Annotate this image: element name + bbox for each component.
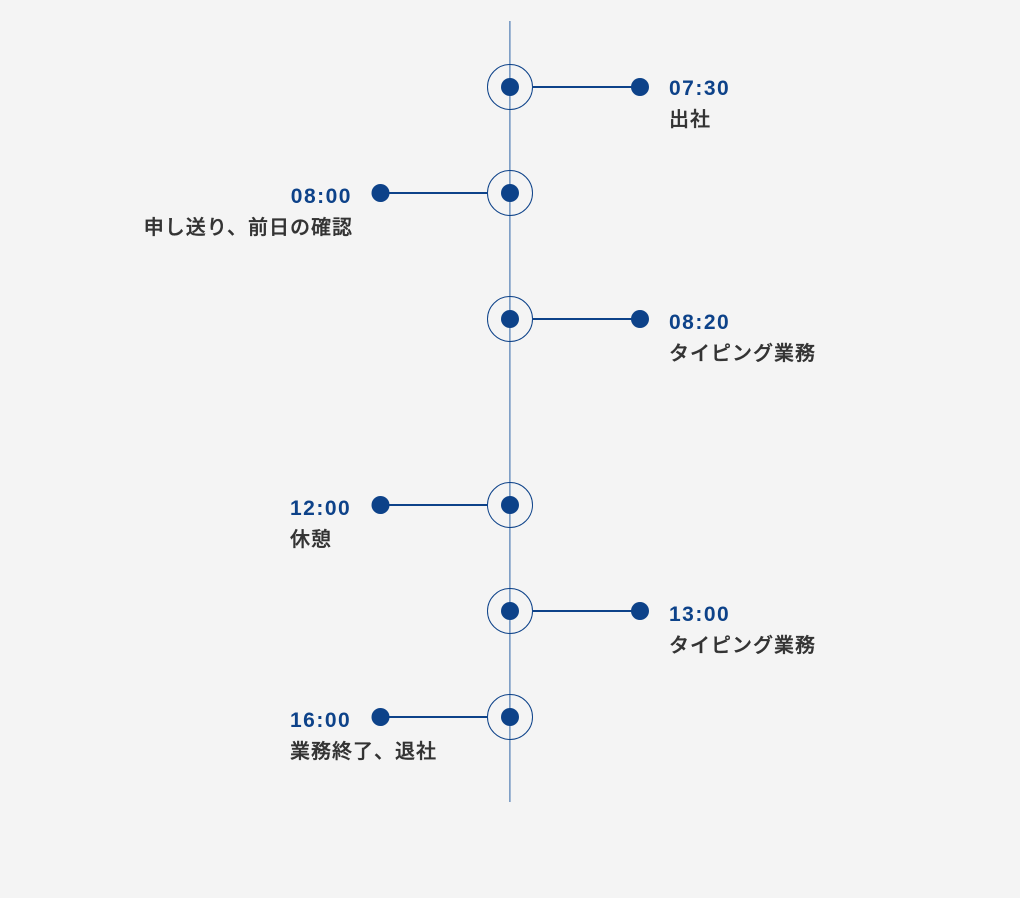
node 12:00 (372, 482, 532, 528)
label 08:00: 08:00 (291, 185, 352, 208)
label 16:00 (290, 709, 437, 763)
label 08:20: 08:20 (669, 311, 730, 334)
label 08:00: 申し送り、前日の確認 (144, 217, 353, 239)
node 16:00 (372, 694, 532, 740)
label 07:30 (669, 77, 730, 131)
label 07:30: 出社 (669, 109, 711, 131)
node 07:30 (488, 64, 649, 110)
label 12:00: 休憩 (290, 529, 332, 551)
node 13:00 (488, 588, 649, 634)
label 16:00: 業務終了、退社 (290, 741, 437, 763)
vertical axis line (509, 21, 511, 802)
label 12:00: 12:00 (290, 497, 351, 520)
label 08:20 (669, 311, 816, 365)
label 07:30: 07:30 (669, 77, 730, 100)
label 08:20: タイピング業務 (669, 343, 816, 365)
label 13:00: タイピング業務 (669, 635, 816, 657)
label 13:00: 13:00 (669, 603, 730, 626)
node 08:20 (488, 296, 649, 342)
label 08:00 (144, 185, 353, 239)
node 08:00 (372, 170, 532, 216)
label 13:00 (669, 603, 816, 657)
label 16:00: 16:00 (290, 709, 351, 732)
label 12:00 (290, 497, 351, 551)
